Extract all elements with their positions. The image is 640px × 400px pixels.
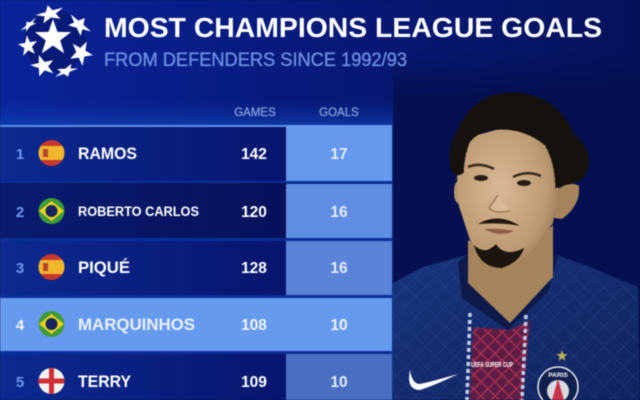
column headers <box>234 107 359 119</box>
subtitle: FROM DEFENDERS SINCE 1992/93 <box>104 50 407 71</box>
row 4: Marquinhos highlighted: 108 <box>241 317 267 334</box>
row 3: Piqué: 16 <box>330 260 348 277</box>
row 2: Roberto Carlos <box>0 183 392 238</box>
PSG crest: PARIS <box>548 372 568 379</box>
row 4: Marquinhos highlighted: 4 <box>16 317 25 334</box>
row 2: Roberto Carlos: 16 <box>330 204 348 221</box>
row 2: Roberto Carlos: ROBERTO CARLOS <box>78 204 199 219</box>
player photo <box>393 94 640 400</box>
row 5: Terry: TERRY <box>78 373 131 391</box>
jersey <box>393 255 640 400</box>
neck <box>468 225 553 323</box>
row 4: Marquinhos highlighted <box>0 298 392 351</box>
row 5: Terry: 5 <box>16 374 24 391</box>
column headers: GOALS <box>319 107 359 119</box>
row 1: Ramos: 1 <box>16 146 24 163</box>
Super Cup badge text: UEFA SUPER CUP <box>471 362 513 369</box>
row 3: Piqué: PIQUÉ <box>78 258 130 277</box>
row 2: Roberto Carlos: 120 <box>241 204 267 221</box>
row 5: Terry: 109 <box>241 374 267 391</box>
row 1: Ramos: 17 <box>330 146 348 163</box>
row 1: Ramos <box>0 125 392 181</box>
beard and mouth <box>474 218 524 268</box>
row 1: Ramos: 142 <box>241 146 267 163</box>
row 4: Marquinhos highlighted: 10 <box>330 317 348 334</box>
row 3: Piqué: 3 <box>16 260 24 277</box>
face <box>457 127 560 270</box>
eyes and brows <box>468 165 541 186</box>
row 2: Roberto Carlos: 2 <box>16 204 24 221</box>
icon: Champions League starball <box>16 2 95 81</box>
ears <box>454 181 579 219</box>
hair <box>451 94 587 186</box>
table <box>0 125 392 400</box>
row 3: Piqué <box>0 241 392 295</box>
title: MOST CHAMPIONS LEAGUE GOALS <box>104 12 602 43</box>
star <box>556 350 568 361</box>
column headers: GAMES <box>234 107 276 119</box>
Nike swoosh <box>409 370 458 390</box>
row 4: Marquinhos highlighted: MARQUINHOS <box>78 316 195 334</box>
nose <box>489 195 510 212</box>
row 3: Piqué: 128 <box>241 260 267 277</box>
row 5: Terry: 10 <box>330 374 348 391</box>
PSG crest <box>538 367 578 400</box>
row 1: Ramos: RAMOS <box>78 145 137 163</box>
row 5: Terry <box>0 354 392 400</box>
